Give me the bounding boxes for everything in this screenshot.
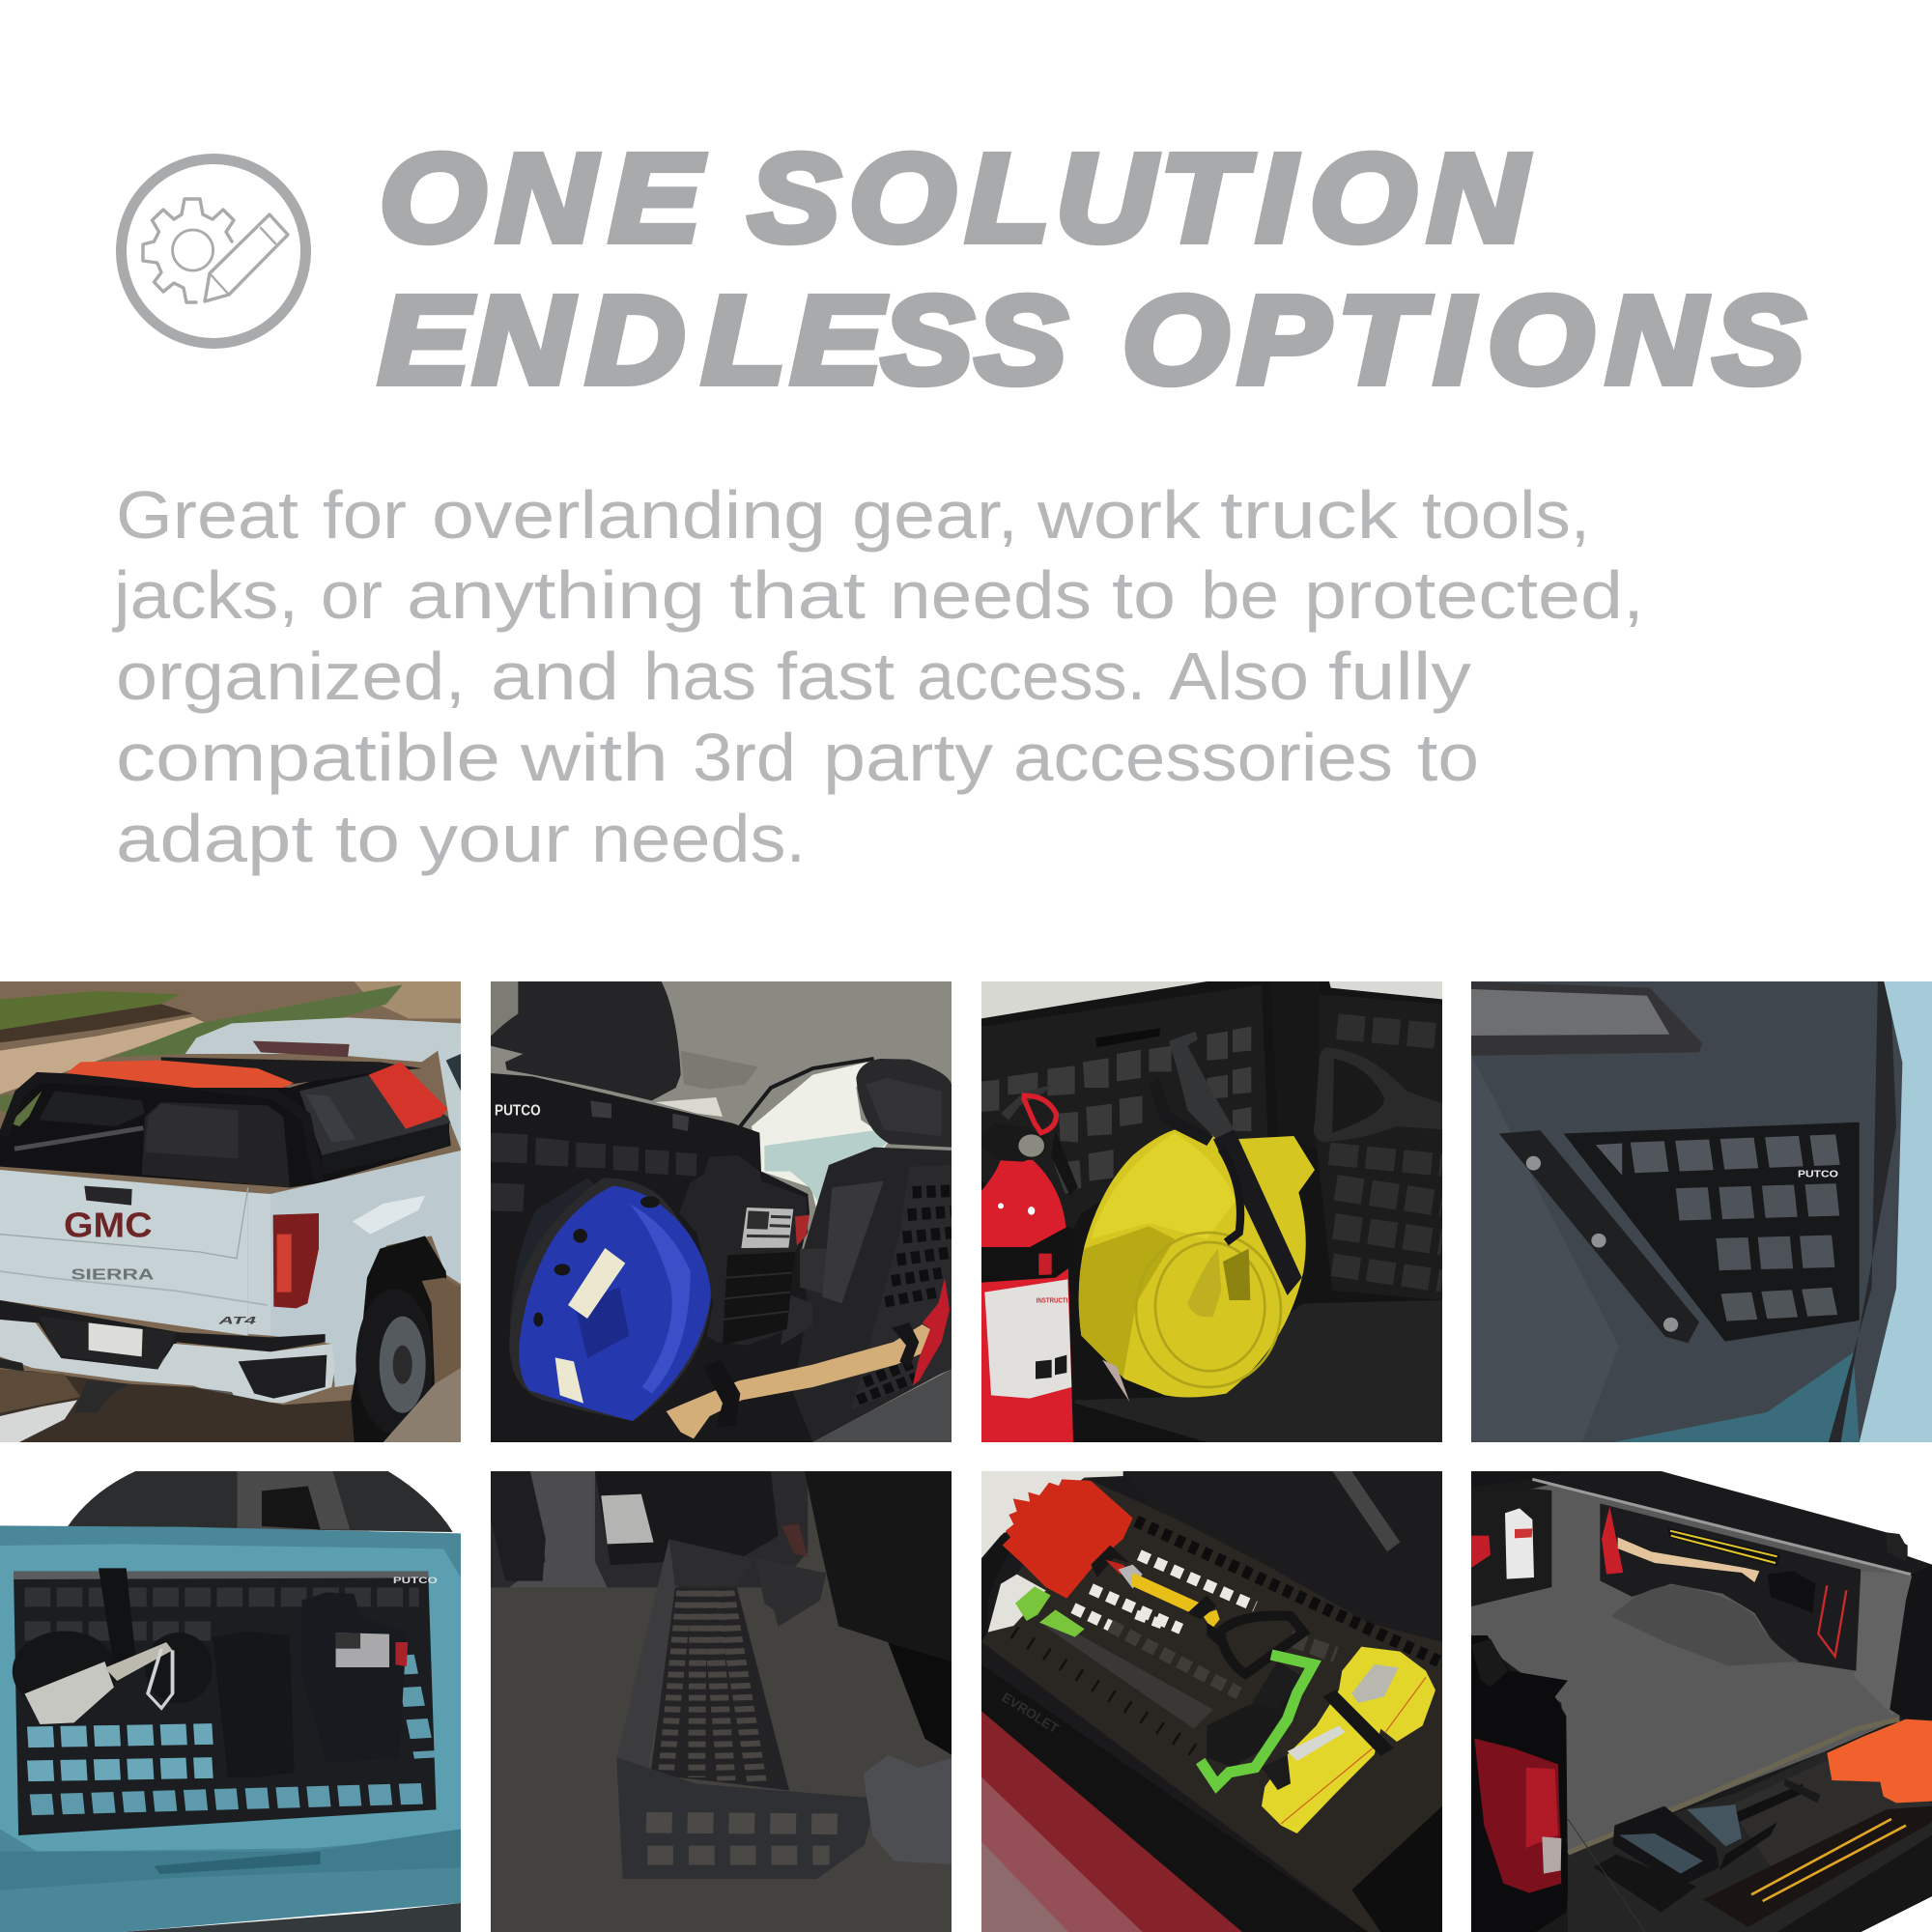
front wall panel with extinguisher xyxy=(1471,1489,1551,1606)
title xyxy=(376,135,1808,406)
rear wheel xyxy=(351,1236,461,1442)
yellow tow strap xyxy=(1262,1647,1435,1833)
red traction board xyxy=(66,1061,294,1088)
axe xyxy=(1602,1507,1759,1582)
description text block: with xyxy=(520,720,668,795)
description text block: to xyxy=(1417,720,1479,795)
description text block: to xyxy=(335,801,400,876)
axe xyxy=(667,1278,950,1438)
tailgate: GMC xyxy=(64,1205,153,1244)
bed and rack xyxy=(0,1057,451,1187)
description text block: your xyxy=(419,801,570,876)
description text block: and xyxy=(491,639,619,714)
angled bracket xyxy=(1499,1130,1699,1343)
left molle panel xyxy=(981,981,1320,1233)
rear window xyxy=(740,1059,890,1210)
bumper xyxy=(0,1300,335,1404)
description text block: needs xyxy=(890,557,1092,633)
dark truck base xyxy=(1471,1471,1932,1932)
description text block: has xyxy=(643,639,756,714)
icon: gear and pencil in circle xyxy=(116,154,311,349)
speaker trim xyxy=(1471,981,1702,1056)
description text block: anything xyxy=(407,557,705,633)
left headrest xyxy=(491,981,681,1100)
right seat xyxy=(781,1059,952,1442)
photo: shovel and straps on bed rail rack xyxy=(981,1471,1442,1932)
jack xyxy=(1613,1778,1821,1887)
truck side and rail xyxy=(981,1664,1368,1932)
yellow shovel handle and grip xyxy=(1091,1546,1303,1674)
photo: white GMC truck with bed rack xyxy=(0,981,461,1442)
molle panel: PUTCO xyxy=(393,1576,438,1585)
description text block: party xyxy=(823,720,993,795)
molle panel on left seat xyxy=(491,1073,812,1442)
right molle panel xyxy=(1317,994,1442,1300)
description text block xyxy=(112,477,1644,876)
description text block: Great xyxy=(116,477,298,553)
metal molle panel xyxy=(1564,1122,1860,1342)
truck bed side and taillight xyxy=(1471,1635,1568,1932)
tactical pouches xyxy=(213,1592,408,1777)
seat anchor bracket xyxy=(864,1755,952,1864)
description text block: for xyxy=(323,477,407,553)
description text block: fast xyxy=(777,639,895,714)
water splash xyxy=(0,1370,364,1442)
floor xyxy=(1075,1300,1442,1442)
yellow tow strap roll xyxy=(1079,1129,1315,1402)
blue helmet xyxy=(509,1178,711,1421)
carpeted bed xyxy=(1471,1484,1913,1851)
molle panel xyxy=(14,1572,438,1835)
description text block: accessories xyxy=(1013,720,1393,795)
truck side and rail: EVROLET xyxy=(999,1690,1062,1736)
description text block: 3rd xyxy=(693,720,796,795)
side wall molle panel xyxy=(1600,1503,1861,1671)
tailgate: SIERRA xyxy=(71,1266,155,1283)
red fuel can xyxy=(369,1062,447,1129)
description text block: organized, xyxy=(116,639,466,714)
tailgate floor xyxy=(1568,1719,1932,1932)
description text block: protected, xyxy=(1304,557,1644,633)
description text block: tools, xyxy=(1422,477,1590,553)
truck side panel xyxy=(270,1151,461,1387)
metal molle panel: PUTCO xyxy=(1798,1169,1838,1179)
tray xyxy=(616,1539,877,1879)
title: ENDLESS OPTIONS xyxy=(379,270,1804,406)
photo: molle panel on door interior xyxy=(1471,981,1932,1442)
molle panel on left seat: PUTCO xyxy=(495,1102,541,1119)
description text block: compatible xyxy=(116,720,500,795)
photo: truck bed with carpet and organized gear xyxy=(1471,1471,1932,1932)
shovel grip xyxy=(1314,1047,1442,1143)
photo: helmet and axe on seat-back panel xyxy=(491,981,952,1442)
description text block: adapt xyxy=(116,801,313,876)
fire extinguisher xyxy=(981,1085,1078,1442)
tailgate: AT4 xyxy=(217,1316,256,1327)
description text block: access. xyxy=(917,639,1146,714)
description text block: truck xyxy=(1220,477,1399,553)
coiled rope and clamp xyxy=(13,1568,213,1724)
description text block: or xyxy=(321,557,383,633)
taillight xyxy=(273,1213,319,1308)
photo: under-seat storage tray on carpet xyxy=(491,1471,952,1932)
rack panel xyxy=(981,1471,1442,1932)
spare tire xyxy=(68,1471,453,1532)
description text block: Also xyxy=(1169,639,1309,714)
photo: panel with pouches on teal tailgate xyxy=(0,1471,461,1932)
tailgate xyxy=(0,1170,270,1336)
description text block: needs. xyxy=(591,801,806,876)
description text block: fully xyxy=(1328,639,1471,714)
description text block: that xyxy=(729,557,866,633)
description text block: to xyxy=(1112,557,1176,633)
red shovel xyxy=(1003,1479,1133,1599)
description text block: overlanding xyxy=(432,477,826,553)
bed rail xyxy=(1471,1471,1932,1719)
description text block: gear, xyxy=(852,477,1018,553)
black rubber strap xyxy=(1149,1032,1302,1295)
description text block: work xyxy=(1037,477,1202,553)
green handled tool xyxy=(1015,1586,1313,1785)
description text block: jacks, xyxy=(112,557,298,633)
photo: fire extinguisher and yellow tow strap xyxy=(981,981,1442,1442)
orange fuel can xyxy=(1827,1719,1932,1803)
first-aid pouch with flag patch xyxy=(679,1155,810,1346)
cab xyxy=(185,1017,461,1149)
description text block: be xyxy=(1201,557,1279,633)
fire extinguisher: INSTRUCTI xyxy=(1037,1295,1067,1304)
